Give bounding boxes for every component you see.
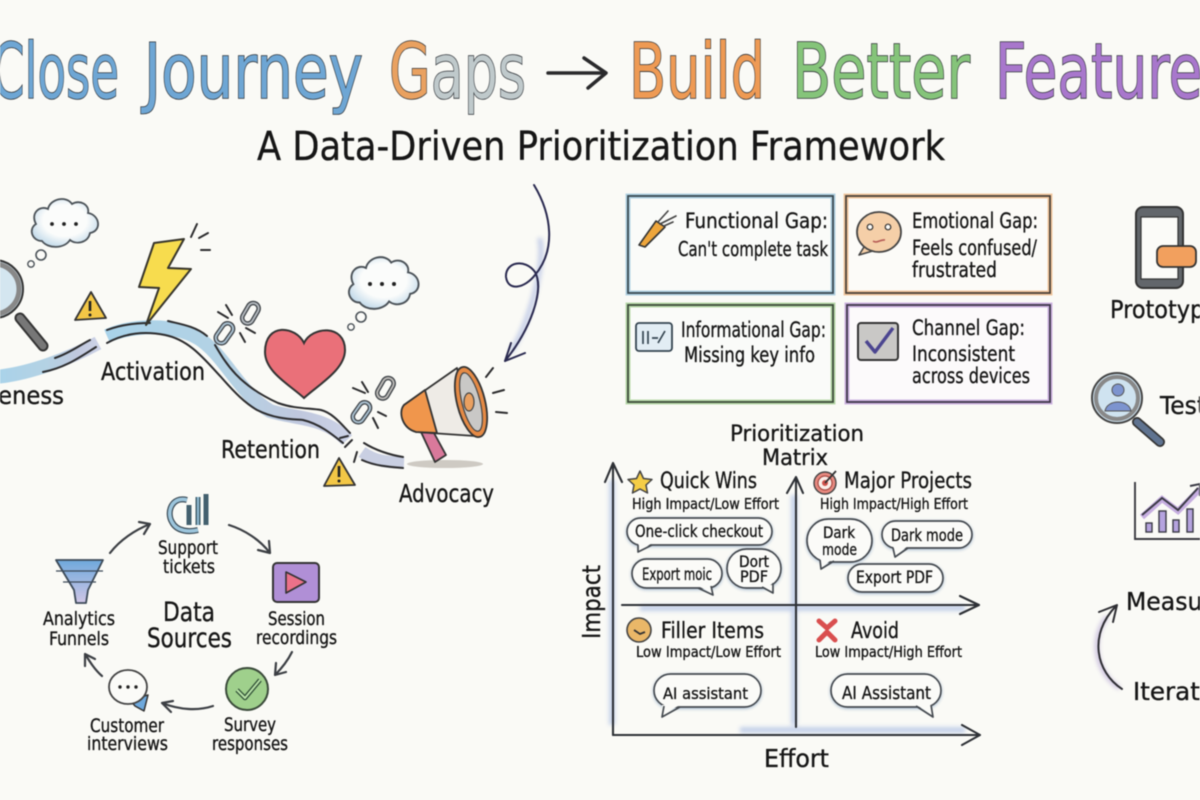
icon: session recordings <box>273 563 319 602</box>
bubble: dort pdf <box>727 549 781 593</box>
text: emotional gap: frustrated <box>912 258 997 282</box>
text: quick wins: Quick Wins <box>660 469 757 494</box>
icon: survey check <box>226 668 268 710</box>
bubble: dark mode tall <box>807 519 872 569</box>
icon: heart <box>265 330 345 398</box>
icon: megaphone <box>401 364 507 468</box>
text: channel gap <box>912 316 1030 388</box>
text: filler items: Low Impact/Low Effort <box>636 643 781 661</box>
bubble: dark mode wide <box>882 521 972 557</box>
text: channel gap: across devices <box>912 364 1030 388</box>
text: emotional gap: Feels confused/ <box>912 236 1038 260</box>
arrow: support to session <box>229 525 270 553</box>
heading: data sources: Data <box>163 597 215 628</box>
icon: warning triangle activation <box>75 292 106 320</box>
text: quick wins: High Impact/Low Effort <box>632 495 779 513</box>
bubble: export pdf: Export PDF <box>856 568 933 588</box>
arrow: customer to analytics <box>85 654 102 676</box>
journey path <box>0 321 404 468</box>
panel: emotional gap <box>846 196 1050 293</box>
bubble: one-click checkout: One-click checkout <box>635 522 763 542</box>
arrow: analytics to support <box>110 522 150 553</box>
text: emotional gap <box>912 209 1038 282</box>
icon: test magnifier <box>1092 373 1160 442</box>
title: Gaps <box>389 28 526 117</box>
label: effort axis: Effort <box>764 744 829 773</box>
heading: prioritization matrix: Matrix <box>762 446 828 471</box>
panel: data sources cycle <box>43 494 337 755</box>
title arrow <box>548 58 606 88</box>
icon: analytics funnel <box>56 560 103 603</box>
curved arrow: iterate to measure <box>1097 605 1122 689</box>
bubble: ai assistant garbled: AI assistant <box>663 684 748 703</box>
text: channel gap: Channel Gap: <box>912 316 1025 340</box>
arrow: survey to customer <box>162 701 213 712</box>
bubble: dark mode tall: Dark <box>823 523 856 542</box>
text: emotional gap: Emotional Gap: <box>912 209 1038 233</box>
panel: channel gap <box>847 305 1050 402</box>
bubble: dort pdf: Dort <box>739 552 769 571</box>
bubble: dark mode wide: Dark mode <box>891 526 963 546</box>
bubble: ai assistant garbled <box>654 674 761 717</box>
text: informational gap: Missing key info <box>684 343 815 367</box>
quadrant: avoid <box>815 619 962 717</box>
text: informational gap <box>681 318 826 367</box>
label: support tickets <box>158 537 218 578</box>
label: Retention: Retention <box>221 435 320 464</box>
label: analytics funnels: Funnels <box>49 628 109 650</box>
bubble: export moic <box>632 559 722 595</box>
label: Activation: Activation <box>101 357 205 386</box>
title <box>0 28 1200 117</box>
icon: confused face bubble <box>857 212 901 255</box>
text: functional gap: Can't complete task <box>678 237 828 261</box>
heading: prioritization matrix: Prioritization <box>730 422 864 447</box>
label: analytics funnels: Analytics <box>43 608 115 630</box>
quadrant: quick wins <box>627 469 781 595</box>
label: impact axis: Impact <box>577 565 606 639</box>
bubble: ai assistant: AI Assistant <box>842 683 931 704</box>
panel: informational gap <box>628 305 833 402</box>
title: Build <box>629 28 765 117</box>
icon: growth chart <box>1135 482 1200 539</box>
icon: magnifier awareness <box>0 260 43 346</box>
label: customer interviews: Customer <box>90 715 164 737</box>
text: avoid: Low Impact/High Effort <box>815 643 962 661</box>
label: session recordings: recordings <box>256 627 337 649</box>
icon: support tickets <box>170 494 206 531</box>
axes <box>605 463 980 745</box>
label: Advocacy: Advocacy <box>399 479 494 508</box>
heading: data sources: Sources <box>147 623 232 654</box>
icon: customer interview bubble <box>109 670 148 711</box>
label: session recordings <box>256 608 337 649</box>
text: functional gap <box>678 209 828 261</box>
curved arrow to journey <box>505 185 549 361</box>
text: avoid: Avoid <box>851 619 899 644</box>
icon: target <box>814 471 836 494</box>
bubble: export pdf <box>848 564 943 592</box>
icon: info chart <box>636 323 672 351</box>
text: major projects: High Impact/High Effort <box>820 495 968 513</box>
subtitle: A Data-Driven Prioritization Framework <box>257 124 946 170</box>
label: support tickets: Support <box>158 537 218 559</box>
icon: broken chain 1 <box>214 301 261 345</box>
arrow: session to survey <box>275 652 292 675</box>
icon: checkbox <box>858 323 898 360</box>
text: filler items <box>636 619 781 661</box>
label: customer interviews <box>87 715 168 755</box>
icon: brush <box>639 211 676 247</box>
icon: warning triangle retention <box>324 458 355 486</box>
icon: red x <box>819 621 835 640</box>
quadrant: filler items <box>627 618 781 717</box>
label: support tickets: tickets <box>163 556 215 578</box>
text: major projects: Major Projects <box>844 469 972 494</box>
icon: star <box>628 471 652 493</box>
bubble: export moic: Export moic <box>642 565 712 585</box>
label: survey responses <box>212 714 288 755</box>
label: survey responses: responses <box>212 733 288 755</box>
text: major projects <box>820 469 972 513</box>
heading: data sources <box>147 597 232 654</box>
icon: prototype phone <box>1136 207 1196 288</box>
label: analytics funnels <box>43 608 115 650</box>
text: quick wins <box>632 469 779 513</box>
heading: prioritization matrix <box>730 422 864 471</box>
text: avoid <box>815 619 962 661</box>
quadrant: major projects <box>807 469 972 592</box>
chart: prioritization matrix <box>577 463 980 773</box>
bubble: one-click checkout <box>627 518 772 552</box>
text: functional gap: Functional Gap: <box>685 209 828 233</box>
icon: thought cloud left <box>28 199 98 267</box>
axis glow <box>612 480 965 730</box>
bubble: dort pdf: PDF <box>740 567 768 586</box>
text: filler items: Filler Items <box>661 619 764 644</box>
label: survey responses: Survey <box>224 714 276 736</box>
title: Journey <box>141 28 363 117</box>
icon: lightning bolt <box>139 224 210 325</box>
text: channel gap: Inconsistent <box>912 342 1015 366</box>
label: customer interviews: interviews <box>87 733 168 755</box>
bubble: dark mode tall: mode <box>822 540 857 559</box>
text: informational gap: Informational Gap: <box>681 318 826 342</box>
panel: functional gap <box>628 196 833 293</box>
icon: broken chain 2 <box>340 376 396 462</box>
label: session recordings: Session <box>268 608 325 630</box>
bubble: ai assistant <box>831 674 941 717</box>
icon: thought cloud right <box>348 257 419 330</box>
title: Better <box>792 28 970 117</box>
icon: clock <box>627 618 651 642</box>
